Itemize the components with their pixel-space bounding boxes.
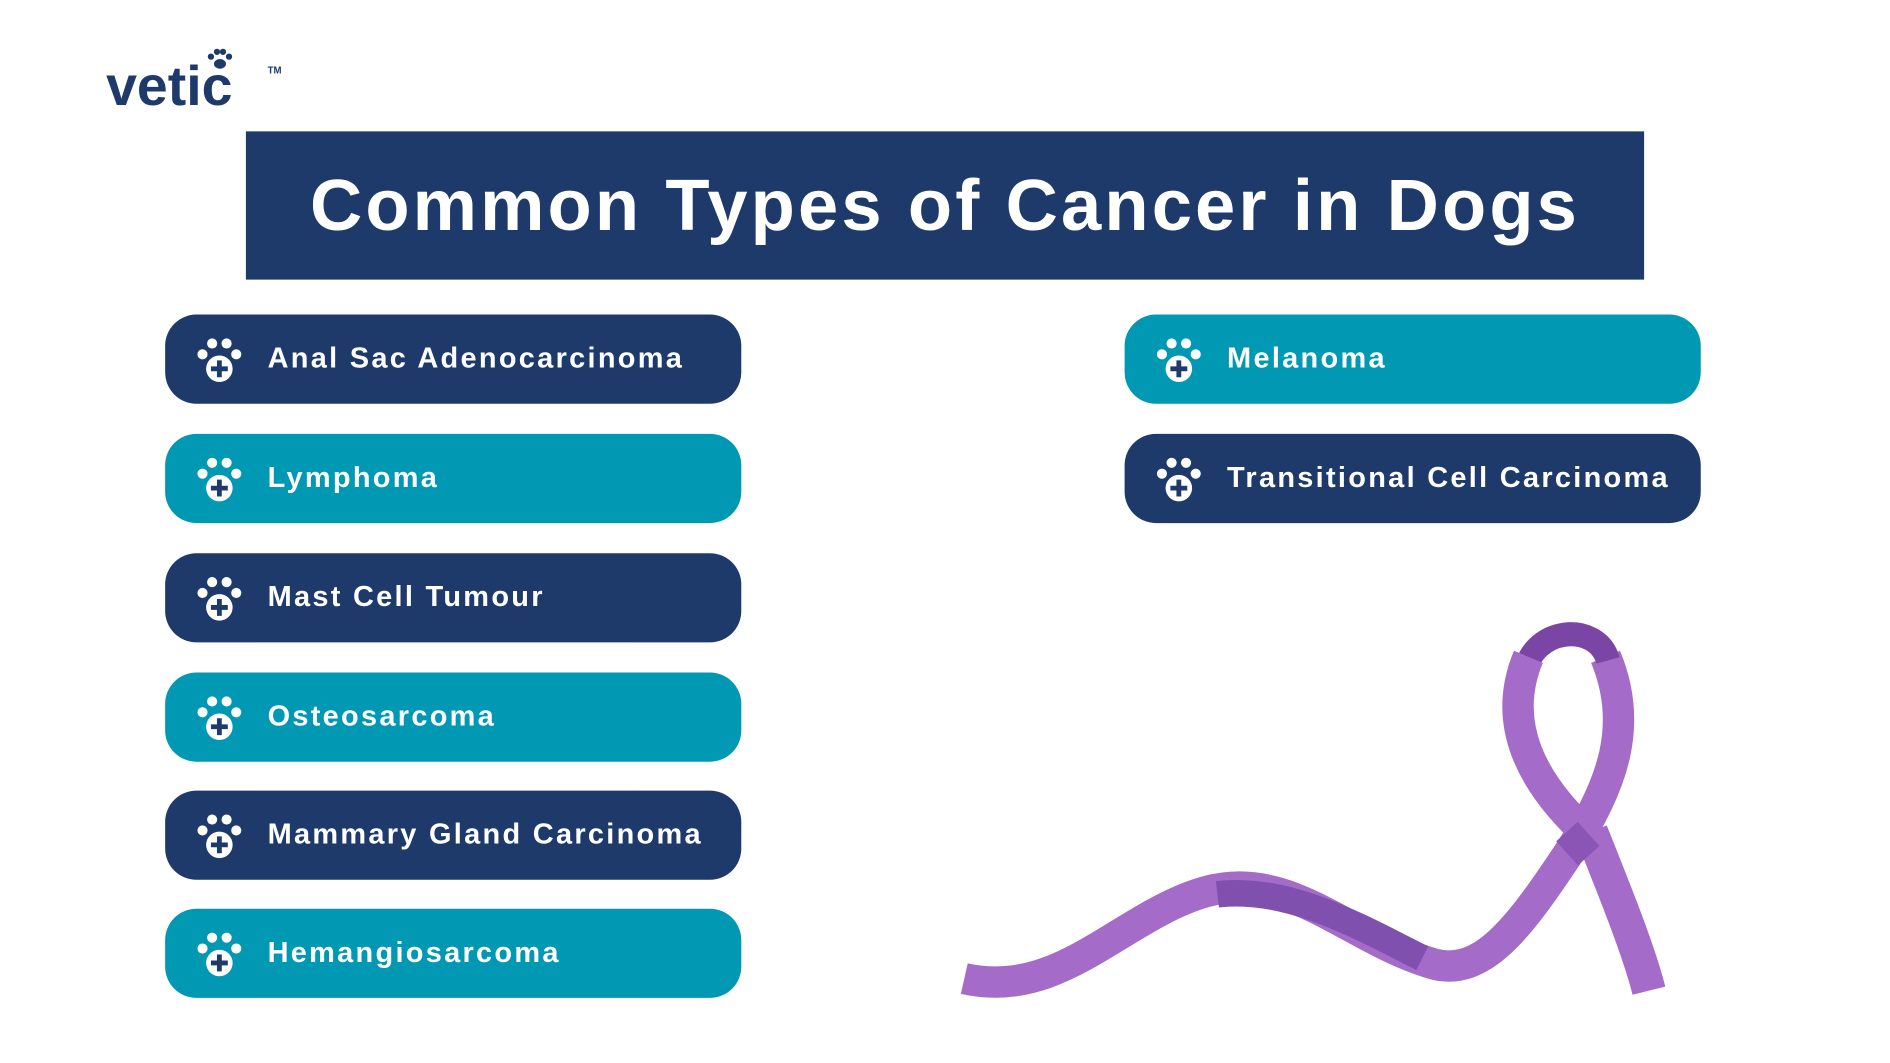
pill: Mammary Gland Carcinoma (165, 791, 741, 880)
pill: Transitional Cell Carcinoma: Transitional Cell Carcinoma (1227, 462, 1670, 494)
logo: vetic (106, 48, 282, 117)
pill: Anal Sac Adenocarcinoma (165, 315, 741, 404)
title banner (246, 131, 1644, 280)
pill: Hemangiosarcoma (165, 909, 741, 998)
pill: Mast Cell Tumour: Mast Cell Tumour (268, 581, 545, 613)
pill: Melanoma: Melanoma (1227, 342, 1387, 375)
logo: vetic: vetic (106, 54, 232, 117)
pill: Lymphoma (165, 434, 741, 523)
logo: vetic: TM (268, 65, 282, 76)
pill: Lymphoma: Lymphoma (268, 462, 439, 494)
pill: Osteosarcoma: Osteosarcoma (268, 700, 496, 733)
pill: Mammary Gland Carcinoma: Mammary Gland Carcinoma (268, 818, 703, 851)
pill: Mast Cell Tumour (165, 553, 741, 642)
pill: Melanoma (1125, 315, 1701, 404)
title banner: Common Types of Cancer in Dogs (310, 165, 1580, 246)
icon: purple awareness ribbon (960, 622, 1666, 998)
pill: Anal Sac Adenocarcinoma: Anal Sac Adenocarcinoma (268, 342, 684, 375)
pill: Transitional Cell Carcinoma (1125, 434, 1701, 523)
pill: Osteosarcoma (165, 673, 741, 762)
pill: Hemangiosarcoma: Hemangiosarcoma (268, 936, 561, 969)
